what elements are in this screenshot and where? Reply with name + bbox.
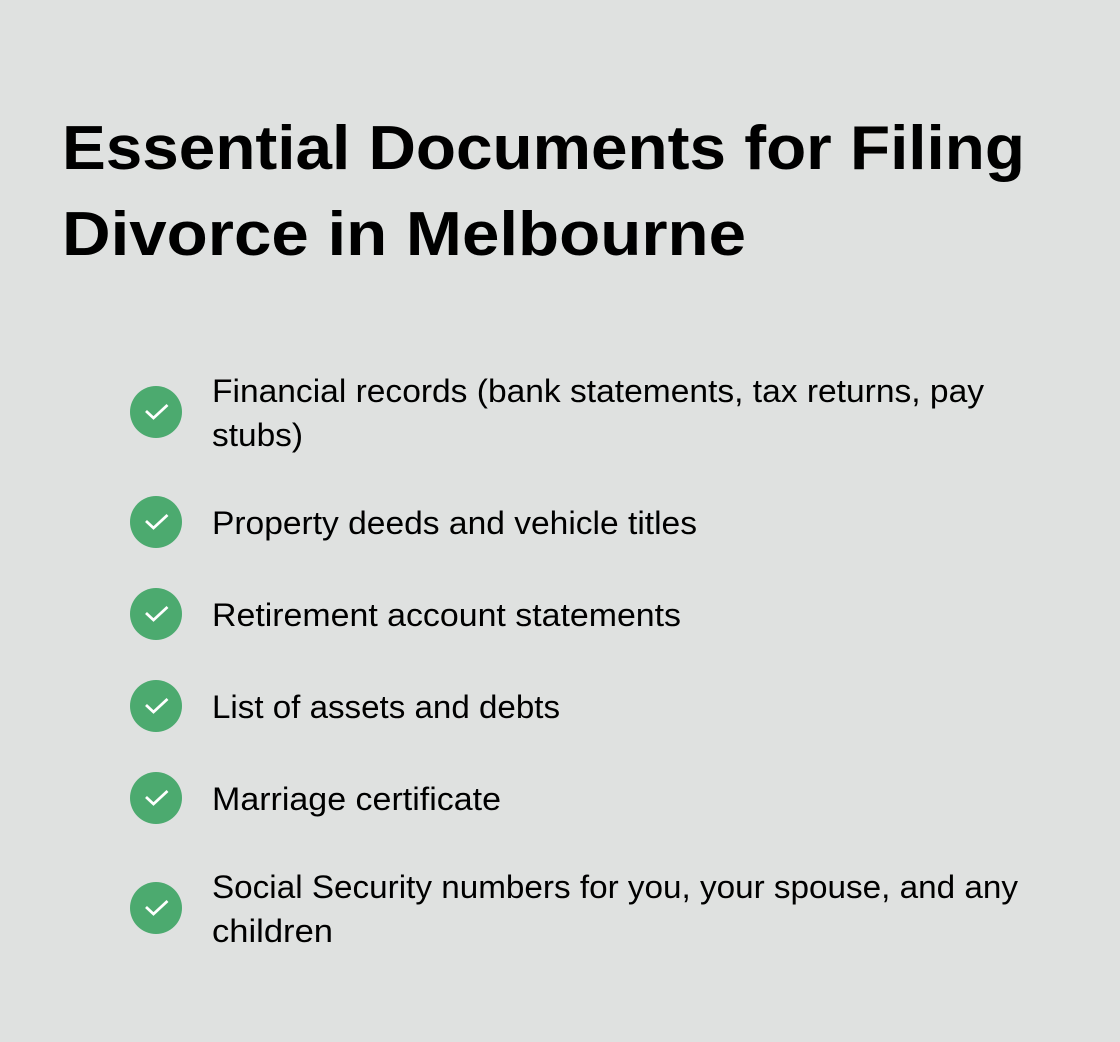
title bbox=[62, 114, 1025, 269]
item: social security: children bbox=[212, 913, 333, 949]
item: financial records bbox=[130, 373, 984, 453]
item: social security bbox=[130, 869, 1018, 949]
item: property deeds bbox=[130, 496, 697, 548]
title: Essential Documents for Filing bbox=[62, 114, 1025, 183]
item: marriage certificate: Marriage certificate bbox=[212, 781, 501, 817]
item: financial records: stubs) bbox=[212, 417, 303, 453]
item: marriage certificate bbox=[130, 772, 501, 824]
item: social security: Social Security numbers for you, your spouse, and any bbox=[212, 869, 1018, 905]
title: Divorce in Melbourne bbox=[62, 200, 746, 269]
checklist bbox=[130, 373, 1018, 949]
item: assets and debts: List of assets and debts bbox=[212, 689, 560, 725]
item: property deeds: Property deeds and vehicle titles bbox=[212, 505, 697, 541]
item: financial records: Financial records (bank statements, tax returns, pay bbox=[212, 373, 984, 409]
item: retirement bbox=[130, 588, 681, 640]
item: retirement: Retirement account statements bbox=[212, 597, 681, 633]
item: assets and debts bbox=[130, 680, 560, 732]
